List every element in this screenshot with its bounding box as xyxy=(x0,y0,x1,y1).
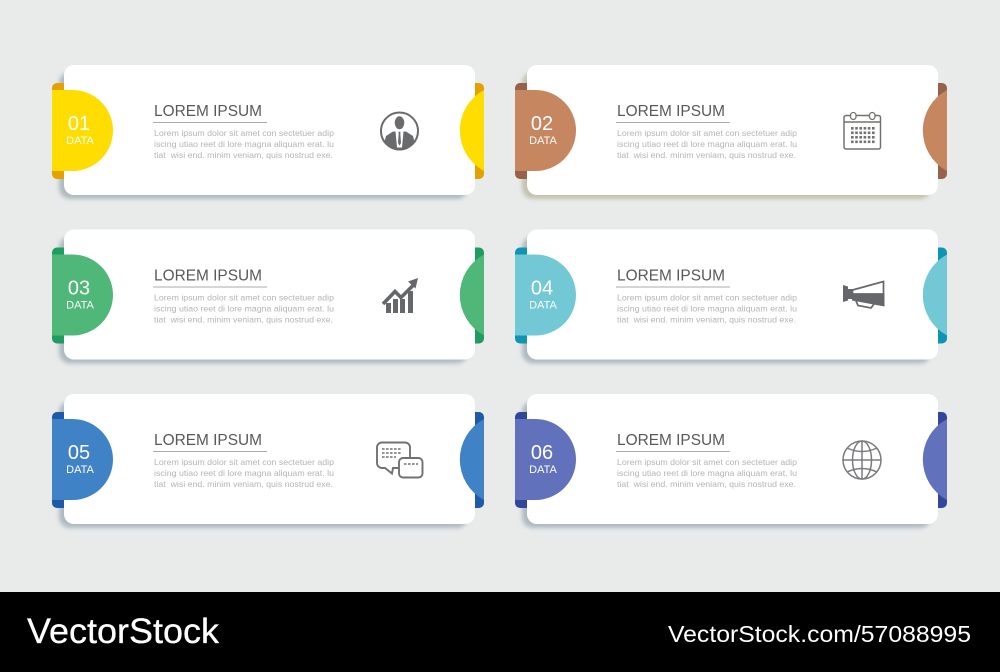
right tab 06 xyxy=(923,419,947,500)
text block 02: Lorem ipsum dolor sit amet con sectetuer adip xyxy=(617,128,797,138)
number tab 06 xyxy=(515,419,576,500)
number tab 05 xyxy=(52,419,113,500)
icon: growth chart xyxy=(383,278,418,313)
number tab 03: 03 xyxy=(68,278,90,300)
heading 04: LOREM IPSUM xyxy=(617,268,725,284)
text block 03 xyxy=(154,292,334,324)
text block 02 xyxy=(617,128,797,160)
number tab 05: 05 xyxy=(68,442,90,464)
number tab 02 xyxy=(515,90,576,171)
text block 06: Lorem ipsum dolor sit amet con sectetuer adip xyxy=(617,457,797,467)
text block 06: iscing utiao reet di lore magna aliquam erat. lu xyxy=(617,468,797,478)
heading 06: LOREM IPSUM xyxy=(617,432,725,449)
heading 05: LOREM IPSUM xyxy=(154,432,262,449)
text block 01 xyxy=(154,128,334,160)
text block 03: Lorem ipsum dolor sit amet con sectetuer adip xyxy=(154,292,334,302)
right tab 01 xyxy=(460,90,484,171)
text block 02: iscing utiao reet di lore magna aliquam erat. lu xyxy=(617,139,797,149)
number tab 06: 06 xyxy=(531,442,553,464)
text block 01: Lorem ipsum dolor sit amet con sectetuer adip xyxy=(154,128,334,138)
icon: megaphone xyxy=(843,282,884,308)
text block 03: tiat wisi end. minim veniam, quis nostrud exe. xyxy=(154,314,333,324)
icon: globe xyxy=(843,441,881,479)
number tab 04: DATA xyxy=(529,300,558,312)
panel: card 04 xyxy=(515,230,947,364)
number tab 01: 01 xyxy=(68,113,90,135)
heading 02: LOREM IPSUM xyxy=(617,103,725,120)
text block 01: iscing utiao reet di lore magna aliquam erat. lu xyxy=(154,139,334,149)
number tab 02: 02 xyxy=(531,113,553,135)
text block 05: iscing utiao reet di lore magna aliquam erat. lu xyxy=(154,468,334,478)
number tab 03 xyxy=(52,254,113,336)
text block 04 xyxy=(617,292,797,324)
panel: card 01 xyxy=(52,65,484,199)
icon: chat bubbles xyxy=(377,442,422,478)
number tab 05: DATA xyxy=(66,464,95,476)
text block 05: tiat wisi end. minim veniam, quis nostrud exe. xyxy=(154,479,333,489)
right tab 05 xyxy=(460,419,484,500)
right tab 02 xyxy=(923,90,947,171)
heading 01: LOREM IPSUM xyxy=(154,103,262,120)
number tab 04 xyxy=(515,254,576,336)
number tab 04: 04 xyxy=(531,278,553,300)
text block 05: Lorem ipsum dolor sit amet con sectetuer adip xyxy=(154,457,334,467)
panel: card 05 xyxy=(52,394,484,528)
number tab 01 xyxy=(52,90,113,171)
footer bar xyxy=(0,592,1000,672)
number tab 02: DATA xyxy=(529,135,558,147)
right tab 04 xyxy=(923,254,947,336)
heading 03: LOREM IPSUM xyxy=(154,268,262,284)
panel: card 03 xyxy=(52,230,484,364)
footer url text: VectorStock.com/57088995 xyxy=(668,621,971,647)
text block 05 xyxy=(154,457,334,489)
text block 04: Lorem ipsum dolor sit amet con sectetuer adip xyxy=(617,292,797,302)
number tab 03: DATA xyxy=(66,300,95,312)
text block 01: tiat wisi end. minim veniam, quis nostrud exe. xyxy=(154,150,333,160)
right tab 03 xyxy=(460,254,484,336)
text block 03: iscing utiao reet di lore magna aliquam erat. lu xyxy=(154,304,334,314)
text block 04: iscing utiao reet di lore magna aliquam erat. lu xyxy=(617,304,797,314)
icon: businessman xyxy=(381,112,418,150)
panel: card 02 xyxy=(515,65,947,199)
text block 04: tiat wisi end. minim veniam, quis nostrud exe. xyxy=(617,314,796,324)
text block 02: tiat wisi end. minim veniam, quis nostrud exe. xyxy=(617,150,796,160)
number tab 01: DATA xyxy=(66,135,95,147)
icon: calendar xyxy=(844,112,880,149)
footer logo text: VectorStock xyxy=(27,612,220,651)
number tab 06: DATA xyxy=(529,464,558,476)
text block 06: tiat wisi end. minim veniam, quis nostrud exe. xyxy=(617,479,796,489)
text block 06 xyxy=(617,457,797,489)
panel: card 06 xyxy=(515,394,947,528)
